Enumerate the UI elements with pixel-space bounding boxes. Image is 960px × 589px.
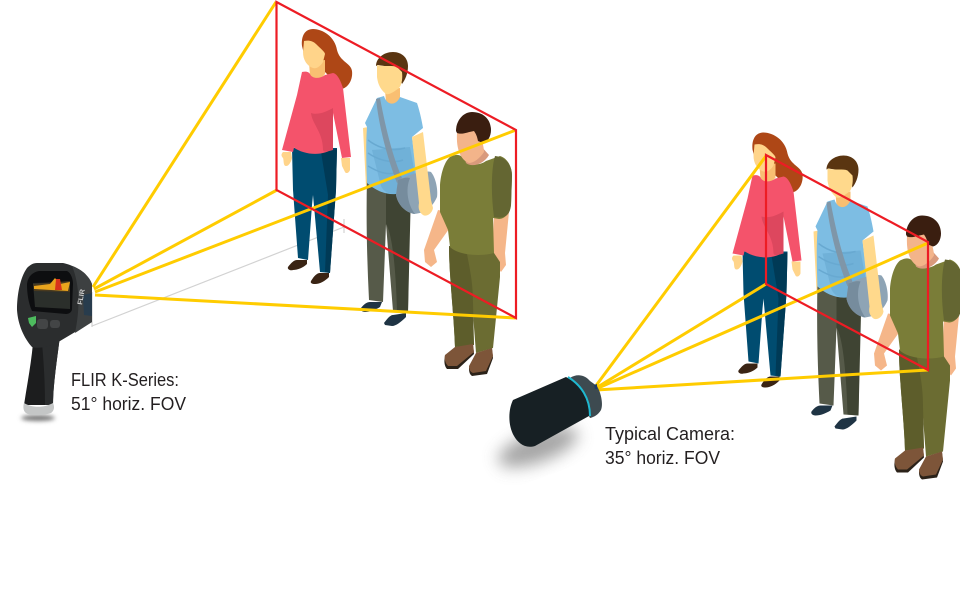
FLIR logo: FLIR (77, 289, 87, 305)
label: FLIR K-Series FOV: 51° horiz. FOV (71, 394, 186, 414)
typical camera field of view: yellow rays (595, 156, 928, 390)
typical camera field of view: red frame (766, 155, 928, 370)
floor grid lines (92, 219, 344, 327)
FLIR field of view: red frame (276, 2, 516, 318)
person: man in olive right group (874, 216, 960, 480)
FLIR field of view: yellow rays (93, 2, 516, 318)
person: man with bag right group (811, 156, 888, 430)
person: woman left group (282, 29, 352, 284)
label: typical camera: Typical Camera: (605, 424, 735, 444)
label: typical camera FOV: 35° horiz. FOV (605, 448, 720, 468)
person: man in olive left group (424, 112, 512, 376)
icon: FLIR K-Series thermal camera (17, 263, 92, 421)
icon: typical camera (493, 375, 602, 475)
person: woman right group (732, 132, 803, 388)
person: man with bag left group (361, 52, 437, 326)
label: FLIR K-Series: FLIR K-Series: (71, 370, 179, 390)
